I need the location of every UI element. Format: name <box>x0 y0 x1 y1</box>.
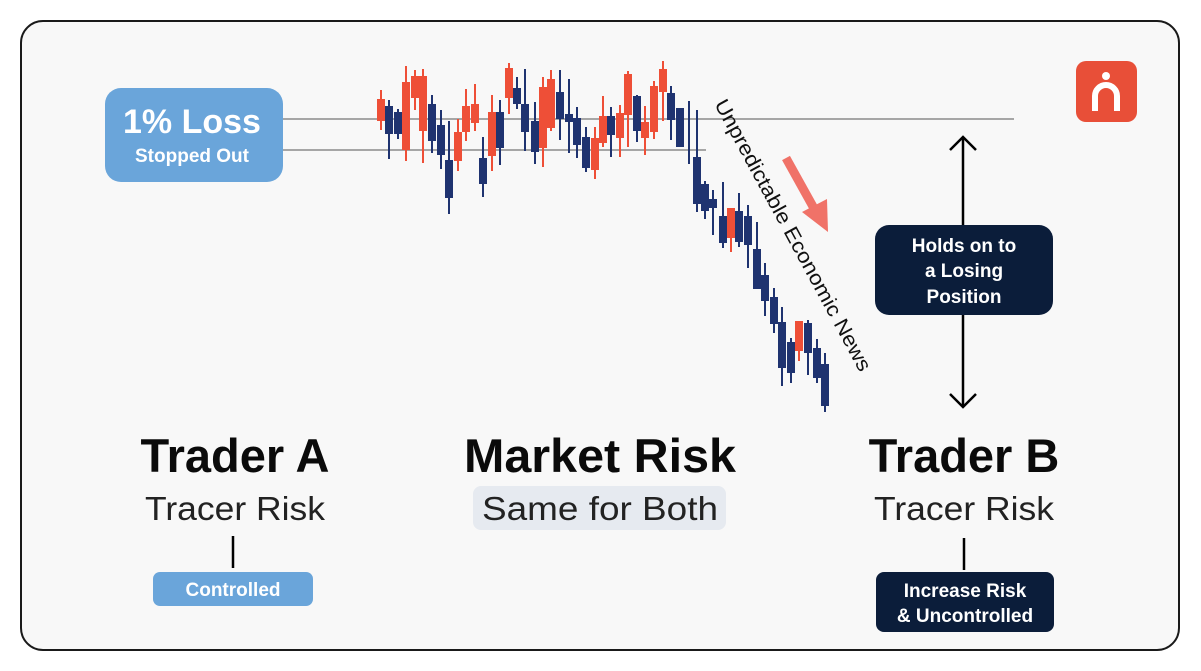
trader B: & Uncontrolled <box>897 606 1033 627</box>
trader B: Increase Risk <box>904 581 1027 602</box>
holds box: Position <box>927 287 1001 308</box>
loss box: 1% Loss <box>123 103 261 141</box>
trader B <box>869 429 1059 632</box>
holds box <box>875 225 1053 315</box>
double arrow <box>950 137 976 407</box>
reference lines <box>282 119 1014 150</box>
rotated label: Unpredictable Economic News <box>710 95 876 375</box>
trader B: Trader B <box>869 429 1059 482</box>
market risk: Same for Both <box>482 490 718 527</box>
logo <box>1076 61 1137 122</box>
arrow: down red <box>786 158 828 232</box>
trader A: Trader A <box>141 429 329 482</box>
trader A: Controlled <box>186 580 280 601</box>
trader B: Tracer Risk <box>874 490 1055 527</box>
trader A <box>141 429 329 606</box>
holds box: a Losing <box>925 261 1003 282</box>
holds box: Holds on to <box>912 236 1016 257</box>
market risk <box>464 429 737 530</box>
candlestick chart <box>378 61 828 412</box>
loss box <box>105 88 283 182</box>
loss box: Stopped Out <box>135 146 250 167</box>
market risk: Market Risk <box>464 429 737 482</box>
trader A: Tracer Risk <box>145 490 326 527</box>
